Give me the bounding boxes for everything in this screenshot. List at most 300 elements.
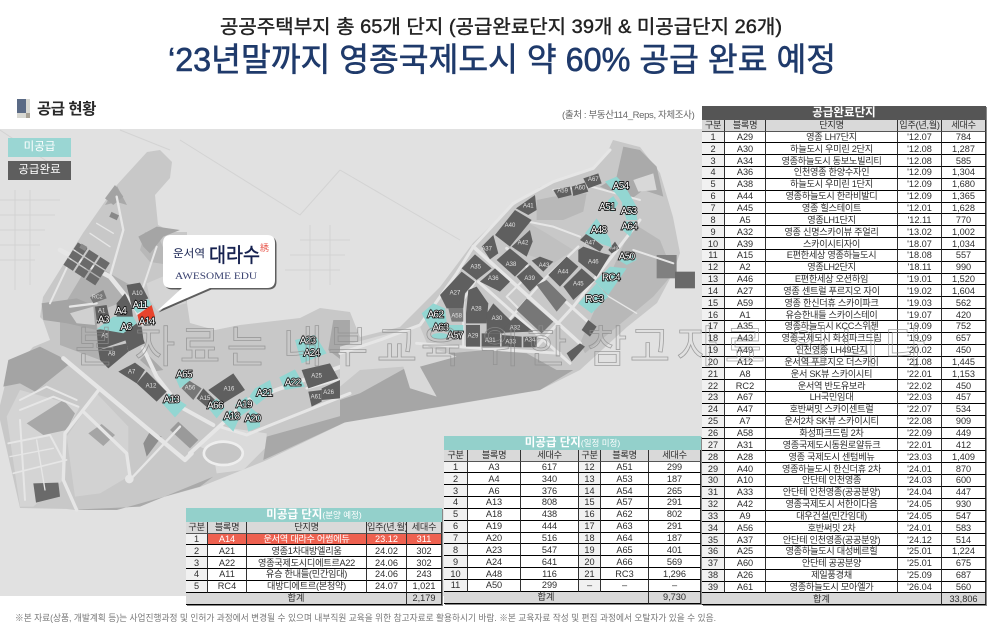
table body: 116 [542,569,557,579]
table body: 376 [542,486,557,496]
east zone [340,147,695,423]
completed blocks: A59 [557,188,569,194]
built blocks: completed: A8 [108,351,116,357]
table body: '19.03 [907,298,932,308]
table body: '22.03 [907,392,932,402]
table body: 21 [708,369,718,379]
table body: '13.02 [907,227,932,237]
table body: 1,224 [952,546,975,556]
table body: 24.06 [375,569,398,579]
table body: 16 [708,310,718,320]
table body: 1,287 [952,144,975,154]
unsupplied blocks: A53 [621,206,638,217]
table body: 23.12 [375,534,398,544]
table body: 운서역 푸르지오 더스카이 [784,357,879,367]
table body: 1,153 [952,369,975,379]
table body: A49 [737,345,753,355]
table body: 17 [708,321,718,331]
table body: 9 [453,557,458,567]
table body: 31 [708,487,718,497]
table body: '18.07 [907,239,932,249]
callout: brand logo pointing to A14 [157,235,276,312]
table body: 영종 LH7단지 [806,132,857,142]
logo: station name: 운서역 [173,247,205,260]
table body: LH국민임대 [810,392,853,402]
table body: 37 [708,558,718,568]
table body: A7 [739,416,751,426]
table title: 미공급 단지(분양 예정) [266,509,362,521]
table body: '19.09 [907,333,932,343]
table body: 516 [542,533,557,543]
table body: A11 [219,569,235,579]
table body: RC3 [615,569,634,579]
completed blocks: A40 [505,223,516,229]
table body: A44 [737,191,753,201]
completed blocks: A67 [588,177,599,183]
table body: 5 [453,509,458,519]
table body: '12.01 [907,203,932,213]
table body: A8 [739,369,751,379]
built blocks: completed: A7 [128,369,136,375]
table body: A32 [737,227,753,237]
table body: 450 [956,381,971,391]
built blocks: completed: A15 [200,396,211,402]
table body: '20.02 [907,345,932,355]
table body: 영종국제도시 화성파크드림 [781,333,882,343]
completed blocks: A28 [471,307,482,313]
table body: 243 [416,569,432,579]
unsupplied blocks: A62 [427,309,444,320]
table body: 1,021 [412,581,436,591]
legend: unsupplied [8,138,71,157]
table body: 대방디에트르(본청약) [267,581,346,591]
unsupplied blocks: A63 [432,323,449,334]
table body: 대우건설(민간임대) [796,511,867,521]
table body: 438 [542,509,557,519]
table body: 5 [194,581,199,591]
table body: 1,445 [952,357,975,367]
table body: 265 [667,486,682,496]
table body: A4 [488,474,500,484]
table body: 299 [542,580,557,590]
table body: A28 [737,452,753,462]
completed blocks [92,283,148,350]
table title [444,436,701,450]
table body: 2,179 [412,593,436,603]
table body: 24 [708,404,718,414]
table body: A34 [737,156,753,166]
table body: 534 [956,404,971,414]
table body: 30 [708,475,718,485]
table body: 808 [542,497,557,507]
table body: A31 [737,440,753,450]
built blocks: completed: A25 [311,373,323,379]
table body: 1,296 [663,569,686,579]
unsupplied blocks: A11 [132,300,149,311]
built blocks: completed [97,323,340,408]
table body: '24.01 [907,523,932,533]
table body: 1,409 [952,452,975,462]
table body: A15 [737,250,753,260]
table body: A24 [486,557,502,567]
completed blocks: A41 [523,204,534,210]
table body: A64 [616,533,633,543]
built blocks: completed: A56 [185,385,196,391]
table body: '23.03 [907,452,932,462]
table title [186,508,442,522]
built blocks: completed: A12 [146,384,157,390]
table body: 24.02 [375,546,398,556]
table body [702,120,986,605]
table body: – [622,580,627,590]
unsupplied blocks: A51 [599,202,616,213]
table body: '24.04 [907,487,932,497]
table body: 27 [708,440,718,450]
table body: 영종하늘도시 동보노빌리티 [781,156,882,166]
table body: 675 [956,558,971,568]
table body: A45 [737,203,753,213]
table body: '12.09 [907,191,932,201]
table body: 909 [956,416,971,426]
completed blocks: A42 [518,240,529,246]
completed blocks: RC2 [92,294,103,300]
table body: 안단테 인천영종(공공분양) [783,487,880,497]
table body: '21.08 [907,357,932,367]
table body: A14 [219,534,235,544]
faint surrounding roads [0,130,460,290]
table body: 990 [956,262,971,272]
table body: 33 [708,511,718,521]
table body: A59 [737,298,753,308]
table body: '25.01 [907,558,932,568]
table body: '25.01 [907,546,932,556]
table body: A46 [737,274,753,284]
table body: 15 [584,497,595,507]
table body: 11 [451,580,460,590]
callout bubble [158,236,276,312]
table body: 하늘도시 우미린 2단지 [790,144,873,154]
table body: 세대수 [662,450,687,460]
completed blocks: A38 [506,262,517,268]
source note: (출처 : 부동산114_Reps, 자체조사) [562,110,694,121]
west zone [3,320,350,510]
table body: 영종 힐스테이트 [802,203,861,213]
table body: 3 [194,558,199,568]
table body: '24.12 [907,535,932,545]
table body: 33,806 [949,594,978,604]
completed blocks: A29 [468,333,479,339]
table body: 657 [956,333,971,343]
table body: 구분 [447,450,464,460]
table body: 784 [956,132,971,142]
subtitle line: 공공주택부지 총 65개 단지 (공급완료단지 39개 & 미공급단지 26개) [220,16,782,38]
table body [186,522,442,605]
unsupplied blocks: A64 [621,221,638,232]
table body: A20 [486,533,502,543]
table body: 18 [708,333,718,343]
completed blocks: A33 [505,339,517,345]
completed blocks: A46 [588,259,599,265]
table body: '22.01 [907,440,932,450]
panel: supplied complexes table [702,106,986,605]
unsupplied blocks: A22 [285,377,302,388]
table body: A61 [737,582,753,592]
table body: 영종LH2단지 [807,262,856,272]
table body: 13 [708,274,718,284]
completed blocks: A10 [132,291,143,297]
table body: 291 [667,497,682,507]
table body: 입주(년,월) [899,120,940,130]
table body: A58 [737,428,753,438]
table body: 안단테 공공분양 [802,558,861,568]
table body: A2 [739,262,751,272]
table body: 4 [710,167,716,177]
table body: RC2 [736,381,754,391]
table body: 14 [584,486,595,496]
table body: A63 [616,521,633,531]
table body: 세대수 [412,522,436,532]
north-west zone [42,185,187,350]
table body: 420 [956,310,971,320]
completed blocks: A45 [573,281,584,287]
table body: 802 [667,509,682,519]
table body: 340 [542,474,557,484]
table body: E편한세상 영종하늘도시 [787,250,876,260]
unsupplied blocks: A65 [176,369,193,380]
unsupplied blocks: A3 [98,315,110,326]
table body: 스카이시티자이 [803,239,860,249]
table body: A9 [739,511,751,521]
table body: '12.08 [907,144,932,154]
table body: 687 [956,570,971,580]
table body: 4 [453,497,458,507]
table body: A3 [488,462,500,472]
table body: A38 [737,179,753,189]
table body: 20 [708,357,718,367]
table body: RC4 [218,581,236,591]
map [0,129,702,596]
table body: 870 [956,464,971,474]
table body: 24.06 [375,558,398,568]
completed blocks: A32 [510,325,521,331]
highlighted block A14 [137,305,156,328]
table body: '19.02 [907,286,932,296]
table body: 1,304 [952,167,975,177]
table body: 401 [667,545,682,555]
table body: 블록명 [215,522,239,532]
table body: A51 [616,462,633,472]
table body: 호반써밋 2차 [808,523,855,533]
table body: 302 [416,546,432,556]
table body: 450 [956,345,971,355]
title [168,16,836,78]
completed blocks: A58 [451,313,463,319]
logo: red seal: 綉 [260,242,269,253]
table body: 18 [584,533,595,543]
table body: 화성파크드림 2차 [799,428,864,438]
completed blocks: A34 [525,338,536,344]
table body: 2 [453,474,458,484]
table body: 제일풍경채 [811,570,852,580]
table body: 930 [956,499,971,509]
table body: 영종하늘도시 KCC스위첸 [784,321,879,331]
table body: '22.08 [907,416,932,426]
table body: A6 [488,486,500,496]
completed blocks: A31 [485,338,496,344]
completed blocks: A49 [610,245,619,250]
table body: 547 [542,545,557,555]
table body: 23 [708,392,718,402]
unsupplied blocks: A18 [224,412,241,423]
table body: 1,680 [952,179,975,189]
unsupplied blocks: A6 [121,322,133,333]
table body: A12 [737,357,753,367]
table body: A36 [737,167,753,177]
table body: 35 [708,535,718,545]
table title: 공급완료단지 [812,107,876,119]
table body: 13 [584,474,595,484]
table body: 38 [708,570,718,580]
table body: A26 [737,570,753,580]
table body: 단지명 [294,522,319,532]
table body: A13 [486,497,502,507]
table body: 영종 센트럴 푸르지오 자이 [783,286,880,296]
table body: E편한세상 오션하임 [795,274,868,284]
unsupplied blocks: A23 [300,336,317,347]
table body: A23 [486,545,502,555]
built blocks: completed: A26 [323,390,335,396]
table body: 세대수 [537,450,562,460]
unsupplied blocks: RC3 [585,294,604,305]
table body: 영종하늘도시 모아엘가 [790,582,873,592]
completed blocks: A36 [488,276,499,282]
table body: 8 [710,215,716,225]
table body: 547 [956,511,971,521]
section heading: supply status [17,99,96,118]
table body: A18 [486,509,502,519]
table body: – [672,580,677,590]
table body: 구분 [188,522,205,532]
table body: A29 [737,132,753,142]
legend: unsupplied: 미공급 [24,141,55,153]
table body: A56 [737,523,753,533]
completed blocks: A43 [539,263,550,269]
table body: 14 [708,286,718,296]
unsupplied blocks [422,177,638,342]
table body: 6 [453,521,458,531]
table body: 6 [710,191,716,201]
table body: 합계 [288,593,304,603]
table body: '24.01 [907,464,932,474]
table body: A37 [737,535,753,545]
table body: A62 [616,509,633,519]
table body: 영종국제도시동원로얄듀크 [783,440,880,450]
table body: 1 [194,534,199,544]
legend: supplied [8,161,71,180]
table body: 영종 한신더휴 스카이파크 [784,298,879,308]
unsupplied blocks: A48 [591,225,608,236]
table body: 19 [708,345,718,355]
table body: 8 [453,545,458,555]
table body: 569 [667,557,682,567]
table body: '18.11 [907,262,932,272]
table body: 585 [956,156,971,166]
table body: 영종 국제도시 센텀베뉴 [788,452,875,462]
table body: 7 [453,533,458,543]
table body: A53 [616,474,633,484]
table body: A10 [737,475,753,485]
table body: 1,628 [952,203,975,213]
table body: A60 [737,558,753,568]
table body: 블록명 [482,450,506,460]
table body: '19.07 [907,310,932,320]
table body: 24.07 [375,581,398,591]
table body: 3 [710,156,716,166]
panel: planned-sale unsupplied table [186,508,442,605]
table body: 32 [708,499,718,509]
table body: 구분 [705,120,721,130]
table body: 유승한내들 스카이스테이 [786,310,877,320]
icon: section marker [17,99,30,118]
heading text: 공급 현황 [37,101,96,118]
table body: 영종하늘도시 대성베르힐 [786,546,877,556]
table body: A43 [737,333,753,343]
table body: A5 [739,215,751,225]
table body: A42 [737,499,753,509]
table body: A1 [739,310,751,320]
table body: 운서역 대라수 어썸에듀 [263,534,350,544]
table body: 187 [667,533,682,543]
completed blocks: A39 [524,276,536,282]
unsupplied blocks: A50 [619,251,636,262]
table body: 291 [667,521,682,531]
table body: '26.04 [907,582,932,592]
table body: '12.11 [907,215,932,225]
table body: 641 [542,557,557,567]
table body: 2 [710,144,716,154]
table body: 11 [708,250,718,260]
table body: 10 [450,569,461,579]
table body: A54 [616,486,633,496]
table body: 하늘도시 우미린 1단지 [790,179,873,189]
table body: 유승 한내들(민간임대) [266,569,347,579]
table body: 12 [708,262,718,272]
table body: 인천영종 LH49단지 [796,345,867,355]
land mass [0,140,680,510]
table body: 운서 SK뷰 스카이시티 [791,369,872,379]
table body: 25 [708,416,718,426]
table body: 2 [194,546,199,556]
unsupplied blocks: A4 [115,306,127,317]
table body: 영종하늘도시 한신더휴 2차 [782,464,881,474]
table body: A66 [616,557,633,567]
table body: '22.02 [907,381,932,391]
table body: 합계 [813,594,830,604]
completed blocks: A37 [481,246,493,252]
table body: A48 [486,569,502,579]
watermark: 본자료는내부교육위한참고자료입니다 [75,323,925,372]
table body: 562 [956,298,971,308]
table body: '18.08 [907,250,932,260]
table body: A67 [737,392,753,402]
table body: 영종하늘도시 한라비발디 [786,191,877,201]
table body: 557 [956,250,971,260]
table body: 10 [708,239,718,249]
completed blocks: A1 [98,309,106,315]
table body: 29 [708,464,718,474]
table body: A22 [219,558,235,568]
table body: 514 [956,535,971,545]
